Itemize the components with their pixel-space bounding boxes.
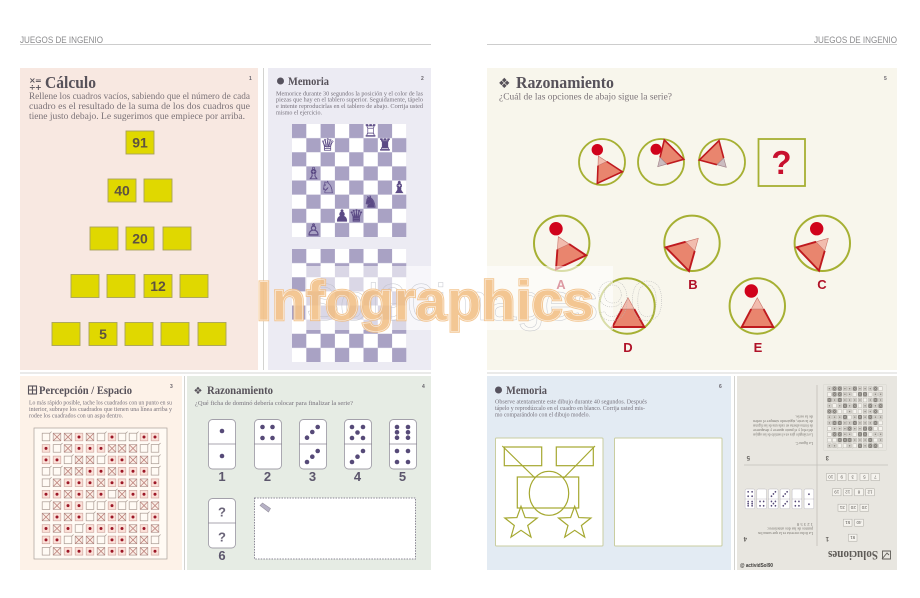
domino 2: 2 (264, 469, 271, 484)
chessboard with pieces: ♛ (349, 206, 364, 226)
text: instructions: Rellene los cuadros vacíos, sabiendo que el número de cada (29, 92, 251, 102)
question square (758, 139, 805, 186)
solution 1 pyramid: 40 (856, 520, 862, 525)
option B: B (688, 277, 698, 292)
domino 4 (344, 420, 372, 484)
text: instructions: interior, subraye los cuadrados que tienen una línea arriba y (29, 407, 172, 413)
domino 6 unknown: ? (218, 530, 226, 544)
upside-down solutions content (743, 385, 890, 563)
solution numbers: 4 (743, 535, 747, 541)
solution 1 pyramid: 12 (867, 490, 873, 495)
page number 4: 4 (422, 384, 425, 390)
solution dominoes (745, 489, 814, 509)
panel: Soluciones (737, 376, 897, 570)
series figure 1 (579, 139, 625, 185)
chessboard with pieces: ♞ (363, 192, 378, 212)
option E: E (754, 340, 763, 355)
solution 1 pyramid: 5 (863, 474, 866, 479)
heading: Razonamiento: Razonamiento (516, 73, 614, 92)
icon: grid (28, 386, 36, 394)
number pyramid (52, 131, 226, 346)
heading: Soluciones: Soluciones (828, 548, 878, 563)
text: instructions (29, 400, 172, 420)
heading: Cálculo: Cálculo (45, 73, 96, 92)
watermark: Infographics (256, 269, 594, 332)
icon: math symbols: × (29, 76, 36, 85)
watermark: Sol90images (306, 274, 598, 332)
text: instructions: mismo el ejercicio. (276, 110, 322, 116)
chessboard with pieces: ♘ (320, 178, 335, 197)
solution numbers: 1 (825, 535, 829, 541)
page number 3: 3 (170, 384, 173, 390)
text: instructions: Lo más rápido posible, tache los cuadrados con un punto en su (29, 400, 172, 406)
watermark: 90 (596, 269, 664, 332)
symbol grid (34, 428, 167, 559)
domino 3: 3 (309, 469, 316, 484)
option E (730, 278, 785, 355)
domino 3 (299, 420, 327, 484)
page number 1: 1 (249, 76, 252, 82)
solution 5 text: de la serie, siguiendo siempre el orden (753, 418, 813, 423)
solution 1 pyramid: 12 (845, 490, 850, 495)
icon: math symbols: = (35, 76, 42, 85)
solution 4 text: La ficha correcta es la que suma los (757, 531, 813, 535)
option A (534, 216, 589, 292)
option D (599, 278, 655, 355)
empty chessboard (292, 249, 406, 362)
solution numbers (743, 454, 829, 541)
solution 5 text: La figura C. (795, 441, 813, 445)
solution 4 text: puntos de las dos anteriores: (767, 526, 813, 530)
icon: diamonds: ❖ (498, 76, 511, 92)
solution numbers: 3 (825, 454, 829, 460)
panel: Percepción / Espacio (20, 376, 182, 570)
panel: Razonamiento figures (487, 68, 897, 370)
chessboard with pieces: ♙ (306, 220, 321, 240)
solution 1 pyramid: 3 (851, 474, 854, 479)
text: instructions: rodee los cuadrados con un aspa dentro. (29, 414, 123, 420)
text: question: ¿Qué ficha de dominó debería colocar para finalizar la serie? (195, 400, 353, 407)
solution 1 pyramid: 91 (850, 535, 855, 540)
number pyramid: 20 (132, 230, 148, 246)
chessboard with pieces (292, 122, 407, 240)
chessboard with pieces: ♗ (306, 164, 321, 183)
solution grid (824, 385, 886, 450)
right page header: JUEGOS DE INGENIO (814, 35, 897, 46)
chessboard with pieces: ♖ (363, 122, 378, 140)
domino 5: 5 (399, 469, 406, 484)
question square: ? (771, 144, 792, 181)
domino 6 unknown: 6 (218, 548, 226, 563)
domino 1 (208, 420, 236, 484)
text: instructions: e intente reproducirlas en el tablero de abajo. Corrija usted (276, 104, 423, 110)
text: instructions (29, 92, 251, 122)
icon: math symbols (29, 76, 42, 92)
text: instructions: tápelo y reprodúzcalo en el cuadro en blanco. Corrija usted mis- (495, 406, 645, 412)
solution 5 text: de forma alterna en cada una de las figuras (752, 424, 813, 428)
heading: Razonamiento: Razonamiento (207, 385, 273, 397)
solution 1 pyramid: 20 (861, 505, 867, 510)
blank drawing box (614, 438, 722, 546)
solution 4 text: 1 2 3 5 8 (797, 522, 813, 526)
series figure 3 (699, 139, 745, 185)
solution 1 pyramid: 8 (857, 490, 860, 495)
heading: Memoria: Memoria (506, 385, 547, 397)
model drawing (496, 438, 603, 546)
answer box (254, 498, 416, 559)
domino 6 unknown (208, 498, 236, 563)
series figure 2 (638, 139, 684, 185)
icon: pencil (260, 503, 270, 512)
solution 1 pyramid: 31 (839, 505, 845, 510)
text: instructions: Memorice durante 30 segundos la posición y el color de las (276, 92, 424, 98)
panel: Memoria drawing (487, 376, 731, 570)
option A: A (556, 277, 566, 292)
icon: check box (882, 551, 890, 559)
panel: Cálculo (20, 68, 258, 370)
solution 1 pyramid: 10 (828, 474, 833, 479)
icon: math symbols: ÷ (29, 83, 36, 92)
chessboard with pieces: ♟ (335, 206, 349, 226)
solution 5 text: La triángulo gira en el sentido de las agujas (752, 432, 813, 436)
option B (664, 216, 720, 292)
left page header: JUEGOS DE INGENIO (20, 35, 103, 46)
solution 1 pyramid: 9 (840, 474, 843, 479)
page number 2: 2 (421, 76, 424, 82)
text: instructions (276, 92, 424, 116)
text: instructions: Observe atentamente este dibujo durante 40 segundos. Después (495, 400, 648, 406)
icon: dot (495, 386, 502, 394)
solution 1 pyramid: 20 (850, 505, 856, 510)
solution 1 pyramid: 51 (845, 520, 850, 525)
watermark: Infographics (256, 269, 594, 332)
number pyramid: 5 (99, 326, 107, 342)
heading: Percepción / Espacio: Percepción / Espacio (39, 385, 132, 397)
solution 1 pyramid: 7 (874, 474, 877, 479)
text: instructions: tiene justo debajo. Le sugerimos que empiece por arriba. (29, 112, 245, 122)
number pyramid: 40 (114, 182, 130, 198)
domino 5 (389, 420, 417, 484)
chessboard with pieces: ♝ (392, 178, 407, 197)
option C (795, 216, 850, 292)
icon: diamonds: ❖ (194, 386, 202, 397)
domino 4: 4 (354, 469, 362, 484)
domino 1: 1 (218, 469, 226, 484)
text: instructions: cuadro es el resultado de la suma de los dos cuadros que (29, 102, 250, 112)
chessboard with pieces: ♜ (378, 136, 392, 154)
solution 4 text (757, 522, 813, 535)
solution 1 pyramid: 19 (834, 490, 839, 495)
text: question: ¿Cuál de las opciones de abajo sigue la serie? (499, 92, 672, 102)
solution numbers: 5 (746, 454, 750, 460)
solution 5 text (752, 414, 813, 445)
text: instructions (495, 400, 648, 418)
option D: D (623, 340, 633, 355)
panel: Razonamiento dominoes (187, 376, 431, 570)
heading: Memoria: Memoria (288, 76, 329, 88)
text: instructions: mo comparándolo con el dibujo modelo. (495, 412, 590, 418)
option C: C (817, 277, 827, 292)
icon: math symbols: + (35, 83, 42, 92)
text: instructions: piezas que hay en el tablero superior. Seguidamente, tápelo (276, 98, 423, 104)
number pyramid: 12 (150, 278, 166, 294)
icon: dot (277, 78, 284, 84)
logo text: @ actividSol90 (740, 563, 773, 569)
domino 2 (254, 420, 282, 484)
domino 6 unknown: ? (218, 504, 226, 520)
chessboard with pieces: ♕ (320, 136, 335, 154)
number pyramid: 91 (132, 134, 148, 150)
solution 5 text: del reloj y el punto aparece y desaparece (753, 428, 813, 432)
page number 5: 5 (884, 76, 887, 82)
panel: Memoria chess (268, 68, 431, 370)
page number 6: 6 (719, 384, 722, 390)
solution 5 text: de la serie. (795, 414, 813, 418)
solution 1 pyramid (826, 474, 880, 541)
